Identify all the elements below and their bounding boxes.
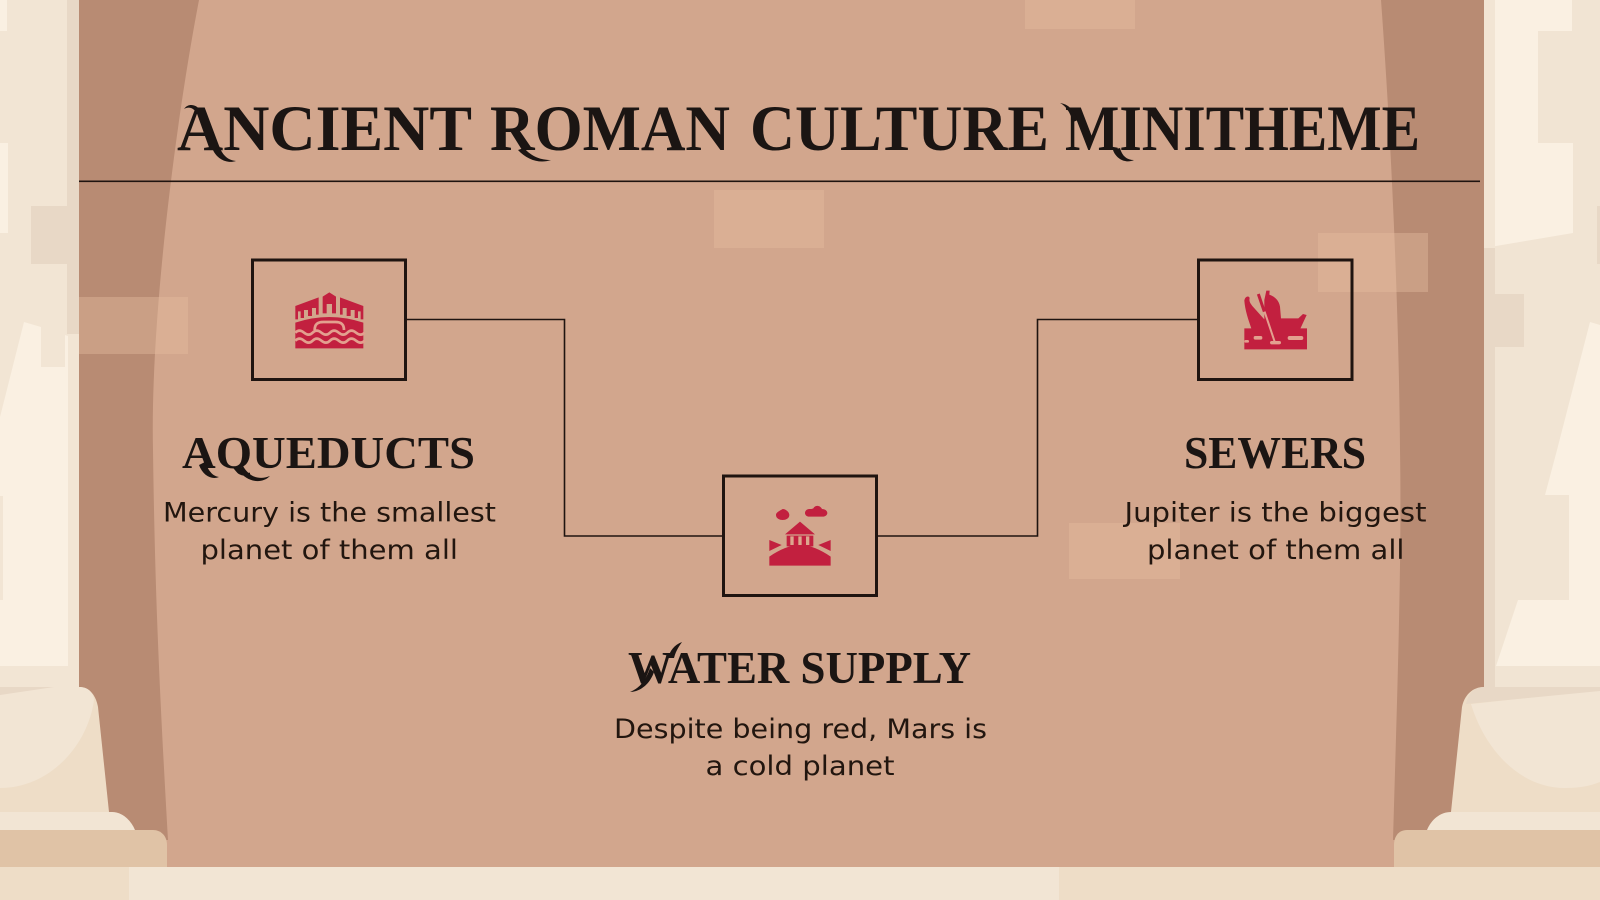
text: aqueducts description: planet of them all — [200, 535, 458, 566]
icon box: water supply — [724, 476, 876, 596]
text: sewers description: Jupiter is the biggest — [1122, 498, 1426, 528]
icon: boat with oar — [1244, 291, 1307, 349]
icon: bridge over water — [295, 292, 365, 348]
panel: sewers — [1122, 260, 1426, 566]
panel: left column — [0, 0, 167, 867]
title: MINITHEME — [1065, 93, 1420, 165]
heading: sewers: SEWERS — [1184, 427, 1366, 478]
title — [177, 93, 1420, 165]
title: CULTURE — [750, 93, 1049, 165]
connector: aqueducts to water supply — [406, 320, 722, 536]
icon box: sewers — [1198, 260, 1352, 380]
text: sewers description — [1122, 498, 1426, 566]
heading swash — [199, 462, 270, 481]
title: ROMAN — [490, 93, 730, 165]
text: sewers description: planet of them all — [1147, 535, 1404, 566]
heading: water supply: WATER SUPPLY — [628, 642, 971, 693]
text: aqueducts description — [163, 498, 496, 566]
panel: aqueducts — [163, 260, 496, 566]
heading swash — [630, 642, 682, 692]
text: aqueducts description: Mercury is the smallest — [163, 498, 496, 528]
title: ANCIENT — [177, 93, 472, 165]
text: water supply description — [614, 714, 987, 782]
heading: aqueducts: AQUEDUCTS — [182, 427, 475, 478]
panel: floor — [0, 867, 1600, 900]
icon: temple on hill — [769, 506, 831, 566]
connector: sewers to water supply — [878, 320, 1197, 536]
panel: right column — [1394, 0, 1600, 867]
panel: water supply — [614, 476, 987, 782]
text: water supply description: Despite being red, Mars is — [614, 714, 987, 745]
text: water supply description: a cold planet — [706, 751, 894, 782]
icon box: aqueducts — [252, 260, 406, 380]
